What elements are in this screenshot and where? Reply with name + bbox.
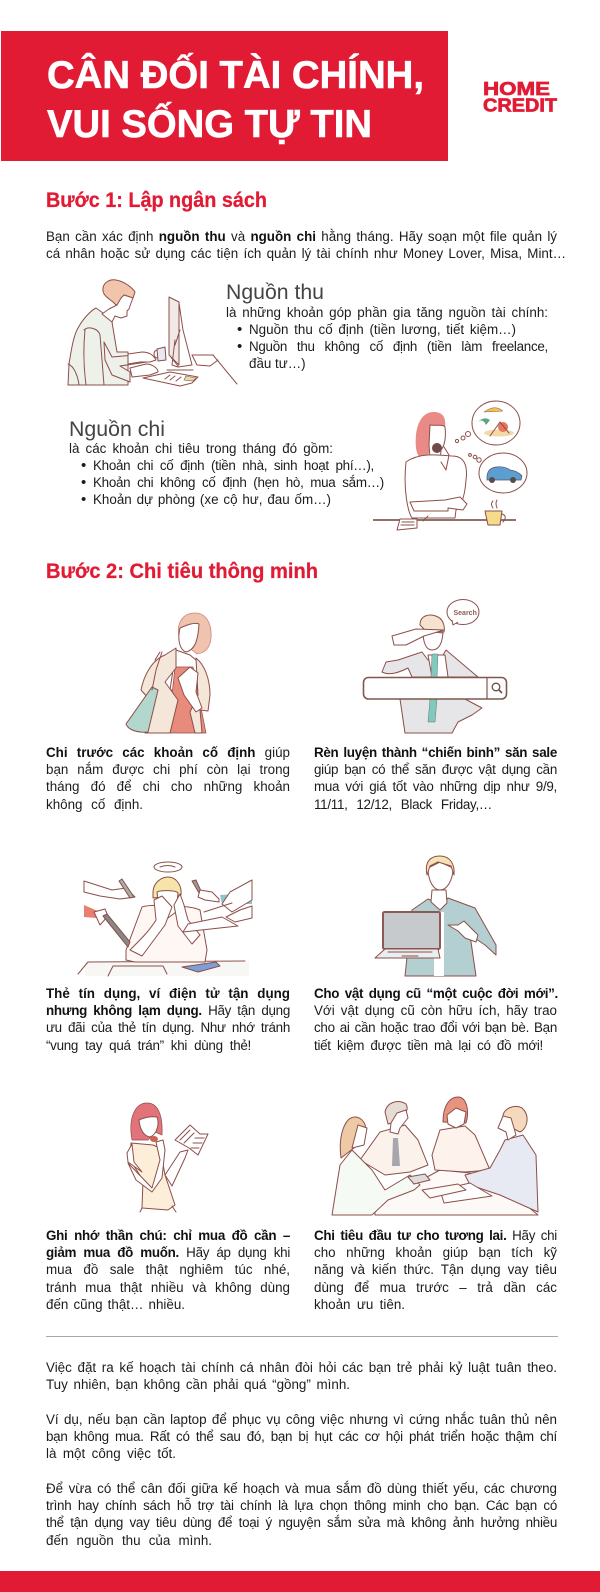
intro paragraph xyxy=(46,228,566,261)
footer bar xyxy=(0,1571,600,1592)
subheading: Nguồn chi: Nguồn chi xyxy=(69,418,165,441)
text: buy what you need: mua đồ sale thật nghiêm túc nhé, xyxy=(46,1262,290,1277)
heading: step 2: Bước 2: Chi tiêu thông minh xyxy=(46,560,318,583)
illustration: stressed man with many hands xyxy=(78,862,252,976)
text: income sources: là những khoản góp phần gia tăng nguồn tài chính: xyxy=(226,305,548,320)
text: expense sources: Khoản chi không cố định (hẹn hò, mua sắm…) xyxy=(93,475,384,490)
text: credit cards: “vung tay quá trán” khi dùng thẻ! xyxy=(46,1038,251,1053)
intro paragraph: Bạn cần xác định nguồn thu và nguồn chi hằng tháng. Hãy soạn một file quản lý xyxy=(46,229,557,244)
illustration: woman reading list xyxy=(127,1103,208,1212)
text: second life for old items xyxy=(314,986,558,1053)
text: second life for old items: cho ai cần hoặc trao đổi với bạn bè. Bạn xyxy=(314,1020,557,1035)
text: credit cards: nhưng không lạm dụng. Hãy tận dụng xyxy=(46,1003,290,1018)
text: expense sources xyxy=(69,441,384,507)
person: woman talking xyxy=(432,1097,490,1172)
closing paragraph 1: Tuy nhiên, bạn không cần phải quá “gồng” mình. xyxy=(46,1377,350,1392)
closing paragraph 3: thể tận dụng vay tiêu dùng để toại ý nguyện sắm sửa mà không ảnh hưởng nhiều xyxy=(46,1515,557,1530)
text: income sources: Nguồn thu không cố định (tiền làm freelance, xyxy=(249,339,548,354)
logo: Home Credit: CREDIT xyxy=(483,96,557,116)
closing paragraph 2 xyxy=(46,1412,558,1461)
closing paragraph 2: Ví dụ, nếu bạn cần laptop để phục vụ công việc nhưng vì cứng nhắc tuân thủ nên xyxy=(46,1412,557,1427)
person: man in suit xyxy=(360,1102,428,1175)
title: VUI SỐNG TỰ TIN xyxy=(47,101,372,146)
notebook and pen xyxy=(397,516,428,530)
text: income sources: Nguồn thu cố định (tiền lương, tiết kiệm…) xyxy=(249,322,516,337)
search bar xyxy=(364,678,506,699)
text: sale hunting xyxy=(314,745,557,812)
text: expense sources: Khoản chi cố định (tiền nhà, sinh hoạt phí…), xyxy=(93,458,374,473)
text: second life for old items: Cho vật dụng cũ “một cuộc đời mới”. xyxy=(314,986,558,1001)
logo: Home Credit: HOME xyxy=(483,79,550,99)
text: sale hunting: 11/11, 12/12, Black Friday,… xyxy=(314,797,492,812)
text: income sources xyxy=(226,305,548,371)
illustration: woman shopping with phone xyxy=(126,613,211,733)
text: pay fixed costs first: không cố định. xyxy=(46,797,143,812)
closing paragraph 1 xyxy=(46,1360,557,1392)
text: expense sources: Khoản dự phòng (xe cộ hư, đau ốm…) xyxy=(93,492,331,507)
illustration: man showing laptop xyxy=(375,856,496,976)
header banner xyxy=(1,31,448,161)
text: invest in the future: cho những khoản giúp bạn tích kỹ xyxy=(314,1245,557,1260)
text: pay fixed costs first: Chi trước các khoản cố định giúp xyxy=(46,745,290,760)
text: sale hunting: mua với giá tốt vào những dịp như 9/9, xyxy=(314,779,557,794)
title: CÂN ĐỐI TÀI CHÍNH, xyxy=(47,52,424,97)
text: invest in the future: khoản ưu tiên. xyxy=(314,1297,405,1312)
text: credit cards xyxy=(46,986,290,1053)
closing paragraph 3: trình hay chính sách hỗ trợ tài chính là lựa chọn thông minh cho bạn. Các bạn có xyxy=(46,1498,557,1513)
text: invest in the future: năng và kiến thức. Tận dụng vay tiêu xyxy=(314,1262,557,1277)
title xyxy=(47,52,424,146)
text: second life for old items: Với vật dụng cũ còn hữu ích, hãy trao xyxy=(314,1003,557,1018)
text: credit cards: ưu đãi của thẻ tín dụng. Như nhớ tránh xyxy=(46,1020,290,1035)
intro paragraph: cá nhân hoặc sử dụng các tiện ích quản lý tài chính như Money Lover, Misa, Mint… xyxy=(46,246,566,261)
thought bubble: car xyxy=(479,453,527,493)
logo: Home Credit xyxy=(483,79,557,116)
text: buy what you need xyxy=(46,1228,290,1312)
heading: step 1: Bước 1: Lập ngân sách xyxy=(46,189,267,212)
text: buy what you need: đến cũng thật… nhiều. xyxy=(46,1297,185,1312)
illustration: woman thinking xyxy=(373,401,527,530)
closing paragraph 2: là một công việc tốt. xyxy=(46,1446,176,1461)
text: income sources: đầu tư…) xyxy=(249,356,306,371)
illustration: man searching xyxy=(364,600,506,733)
coffee cup xyxy=(485,500,505,525)
text: buy what you need: giảm mua đồ muốn. Hãy áp dụng khi xyxy=(46,1245,290,1260)
person: woman in green xyxy=(332,1117,420,1215)
text: credit cards: Thẻ tín dụng, ví điện tử tận dụng xyxy=(46,986,290,1001)
text: pay fixed costs first: tháng đó để chi cho những khoản xyxy=(46,779,290,794)
illustration: man at computer xyxy=(68,280,237,386)
closing paragraph 3: Để vừa có thể cân đối giữa kế hoạch và mua sắm đồ dùng thiết yếu, các chương xyxy=(46,1481,557,1496)
text: buy what you need: tránh mua thật nhiều và không dùng xyxy=(46,1280,290,1295)
text: second life for old items: tiết kiệm được tiền mà lại có đồ mới! xyxy=(314,1038,543,1053)
speech label: Search: Search xyxy=(454,610,477,617)
closing paragraph 2: bạn không mua. Rất có thể sau đó, bạn bị hụt các cơ hội phát triển hoặc thậm chí xyxy=(46,1429,557,1444)
subheading: Nguồn thu: Nguồn thu xyxy=(226,281,324,304)
text: sale hunting: giúp bạn có thể săn được vật dụng cần xyxy=(314,762,557,777)
text: expense sources: là các khoản chi tiêu trong tháng đó gồm: xyxy=(69,441,333,456)
text: invest in the future: Chi tiêu đầu tư cho tương lai. Hãy chi xyxy=(314,1228,557,1243)
text: sale hunting: Rèn luyện thành “chiến binh” săn sale xyxy=(314,745,557,760)
papers on table xyxy=(408,1174,492,1203)
text: invest in the future xyxy=(314,1228,557,1312)
text: invest in the future: dùng để mua trước – trả dần các xyxy=(314,1280,557,1295)
person: man in blue suit xyxy=(465,1106,538,1212)
text: pay fixed costs first xyxy=(46,745,290,812)
text: pay fixed costs first: bạn nắm được chi phí còn lại trong xyxy=(46,762,290,777)
text: buy what you need: Ghi nhớ thần chú: chỉ mua đồ cần – xyxy=(46,1228,290,1243)
illustration: team meeting xyxy=(332,1097,538,1215)
closing paragraph 3: đến nguồn thu của mình. xyxy=(46,1533,212,1548)
closing paragraph 3 xyxy=(46,1480,557,1548)
thought bubble: beach xyxy=(472,401,520,445)
closing paragraph 1: Việc đặt ra kế hoạch tài chính cá nhân đòi hỏi các bạn trẻ phải kỷ luật tuân theo. xyxy=(46,1360,557,1375)
